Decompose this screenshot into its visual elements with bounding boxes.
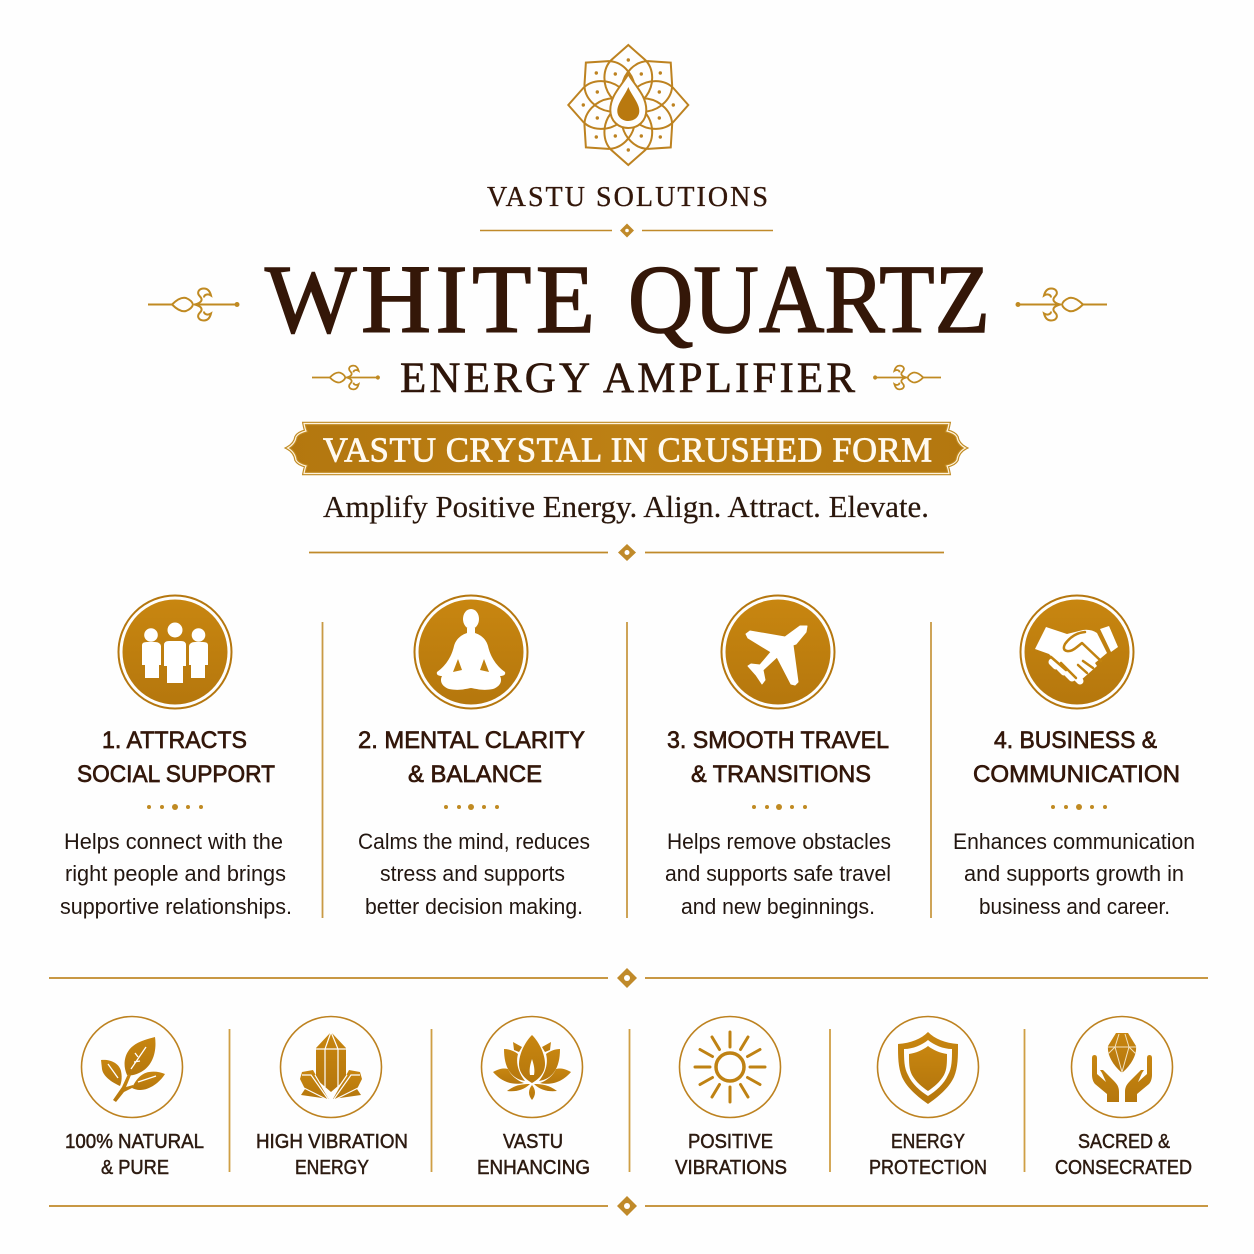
subtitle: ENERGY AMPLIFIER bbox=[400, 355, 855, 402]
divider middle bbox=[49, 968, 1208, 988]
divider top bbox=[309, 544, 944, 561]
icon: meditation bbox=[414, 596, 528, 708]
icon: airplane bbox=[722, 596, 834, 708]
label: ENHANCING bbox=[477, 1156, 590, 1179]
dots bbox=[1051, 804, 1107, 810]
label: ENERGY bbox=[891, 1130, 965, 1153]
brand divider bbox=[480, 224, 773, 238]
panel: smooth travel bbox=[665, 596, 891, 919]
divider bottom bbox=[49, 1196, 1208, 1216]
description: business and career. bbox=[979, 894, 1170, 919]
label: POSITIVE bbox=[688, 1130, 773, 1153]
right title flourish bbox=[1016, 288, 1107, 320]
title: WHITE bbox=[265, 246, 595, 353]
heading: 1. ATTRACTS bbox=[102, 727, 247, 754]
label: VASTU bbox=[503, 1130, 563, 1153]
badge: high vibration energy bbox=[256, 1016, 408, 1179]
icon: people bbox=[118, 596, 232, 708]
panel: mental clarity bbox=[358, 596, 590, 919]
dots bbox=[147, 804, 203, 810]
dots bbox=[444, 804, 499, 810]
right subtitle flourish bbox=[873, 366, 941, 389]
description: Enhances communication bbox=[953, 829, 1195, 854]
label: CONSECRATED bbox=[1055, 1156, 1192, 1179]
label: VIBRATIONS bbox=[675, 1156, 787, 1179]
heading: & BALANCE bbox=[408, 761, 542, 788]
icon: shield bbox=[878, 1016, 978, 1118]
description: and supports growth in bbox=[964, 861, 1184, 886]
description: supportive relationships. bbox=[60, 894, 292, 919]
logo: lotus with drop bbox=[568, 45, 688, 165]
label: PROTECTION bbox=[869, 1156, 987, 1179]
icon: handshake bbox=[1020, 596, 1134, 708]
tagline: Amplify Positive Energy. Align. Attract. Elevate. bbox=[323, 489, 929, 524]
icon: hands holding gem bbox=[1072, 1016, 1172, 1118]
description: stress and supports bbox=[380, 861, 565, 886]
badge: sacred and consecrated bbox=[1055, 1016, 1192, 1179]
banner bbox=[288, 424, 966, 474]
banner text: VASTU CRYSTAL IN CRUSHED FORM bbox=[323, 432, 932, 470]
description: right people and brings bbox=[65, 861, 286, 886]
label: ENERGY bbox=[295, 1156, 369, 1179]
panel: attracts social support bbox=[60, 596, 292, 919]
description: Calms the mind, reduces bbox=[358, 829, 590, 854]
description: better decision making. bbox=[365, 894, 583, 919]
badge: vastu enhancing bbox=[477, 1016, 590, 1179]
icon: crystal bbox=[280, 1016, 382, 1118]
badge: positive vibrations bbox=[675, 1016, 787, 1179]
heading: 3. SMOOTH TRAVEL bbox=[667, 727, 889, 754]
heading: COMMUNICATION bbox=[973, 761, 1180, 788]
left subtitle flourish bbox=[312, 366, 380, 389]
panel: business and communication bbox=[953, 596, 1195, 919]
brand name: VASTU SOLUTIONS bbox=[487, 182, 768, 213]
badge: energy protection bbox=[869, 1016, 987, 1179]
label: 100% NATURAL bbox=[65, 1130, 204, 1153]
heading: 2. MENTAL CLARITY bbox=[358, 727, 585, 754]
badge: natural and pure bbox=[65, 1016, 204, 1179]
heading: 4. BUSINESS & bbox=[994, 727, 1157, 754]
dots bbox=[752, 804, 807, 810]
description: Helps connect with the bbox=[64, 829, 283, 854]
description: Helps remove obstacles bbox=[667, 829, 891, 854]
icon: lotus bbox=[482, 1016, 582, 1118]
badge separators bbox=[230, 1029, 1024, 1172]
heading: & TRANSITIONS bbox=[691, 761, 871, 788]
description: and new beginnings. bbox=[681, 894, 875, 919]
label: SACRED & bbox=[1078, 1130, 1170, 1153]
icon: leaves bbox=[82, 1016, 182, 1118]
label: & PURE bbox=[101, 1156, 169, 1179]
heading: SOCIAL SUPPORT bbox=[77, 761, 275, 788]
label: HIGH VIBRATION bbox=[256, 1130, 408, 1153]
column separators bbox=[322, 622, 931, 918]
icon: sun bbox=[680, 1016, 780, 1118]
title: QUARTZ bbox=[628, 246, 990, 353]
left title flourish bbox=[148, 288, 240, 320]
description: and supports safe travel bbox=[665, 861, 891, 886]
